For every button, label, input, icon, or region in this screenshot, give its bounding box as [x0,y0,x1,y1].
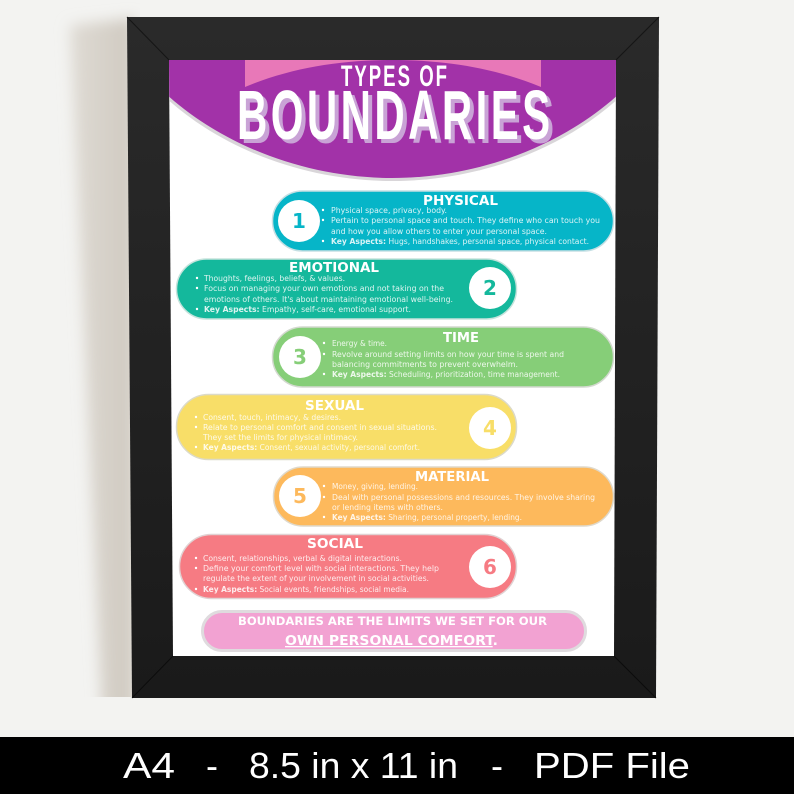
title line: types of: TYPES OF [341,60,447,93]
pink ribbon [245,60,541,87]
body text: Consent, relationships, verbal & digital interactions. [203,554,402,563]
number badge 5: 5 [293,484,307,508]
panel: social [180,534,516,598]
header banner [165,60,620,181]
heading: SOCIAL [307,536,363,552]
number badge 1: 1 [292,209,306,233]
body text: Revolve around setting limits on how your time is spent and [332,350,564,359]
body text: Physical space, privacy, body. [331,206,447,215]
title [237,60,554,159]
body text: Focus on managing your own emotions and not taking on the [204,284,444,293]
body text: Money, giving, lending. [332,482,418,491]
body text: or lending items with others. [332,503,443,512]
number badge 2 [469,267,511,309]
number badge 6: 6 [483,555,497,579]
dome shadow [169,86,616,181]
number badge 1 [278,200,320,242]
body text [195,554,439,594]
panel: sexual [176,394,516,460]
body text: regulate the extent of your involvement in social activities. [203,574,429,583]
number badge 5 [279,475,321,517]
panel: material [274,467,614,526]
body text: Consent, touch, intimacy, & desires. [203,413,341,422]
body text: Energy & time. [332,339,387,348]
number badge 2: 2 [483,276,497,300]
callout banner [202,612,586,650]
footer bar [0,737,794,794]
body text [322,206,600,246]
poster paper [169,60,616,656]
body text: Key Aspects: Empathy, self-care, emotional support. [204,305,411,314]
number badge 4 [469,407,511,449]
black picture frame [127,17,659,698]
body text: Deal with personal possessions and resources. They involve sharing [332,493,595,502]
heading: MATERIAL [415,469,489,485]
footer: dimensions: 8.5 in x 11 in [249,745,458,786]
heading: TIME [443,330,479,346]
title shadow: BOUNDARIES [241,81,554,159]
body text [195,413,437,452]
heading: SEXUAL [305,398,364,414]
body text [196,274,453,314]
body text: Key Aspects: Consent, sexual activity, personal comfort. [203,443,420,452]
body text [323,482,595,522]
footer: file type: PDF File [534,745,690,786]
body text: Key Aspects: Sharing, personal property, lending. [332,513,522,522]
panel: physical [272,191,614,251]
number badge 6 [469,546,511,588]
footer: dash: - [206,745,218,786]
body text: balancing commitments to prevent overwhelm. [332,360,518,369]
body text: They set the limits for physical intimacy. [202,433,358,442]
body text: Key Aspects: Scheduling, prioritization, time management. [332,370,560,379]
callout line 1: BOUNDARIES ARE THE LIMITS WE SET FOR OUR [238,614,547,628]
body text: Key Aspects: Social events, friendships, social media. [203,585,409,594]
heading: PHYSICAL [423,193,498,209]
wall shadow [70,18,135,720]
title line: boundaries: BOUNDARIES [237,77,550,155]
body text: emotions of others. It's about maintaining emotional well-being. [204,295,453,304]
number badge 4: 4 [483,416,497,440]
purple dome [165,60,620,178]
body text: Pertain to personal space and touch. They define who can touch you [331,216,600,225]
footer: size: A4 [123,745,175,786]
body text [323,339,564,379]
callout line 2: OWN PERSONAL COMFORT . [285,634,498,649]
body text: Key Aspects: Hugs, handshakes, personal space, physical contact. [331,237,589,246]
number badge 3: 3 [293,345,307,369]
body text: Relate to personal comfort and consent in sexual situations. [203,423,437,432]
body text: and how you allow others to enter your personal space. [331,227,547,236]
body text: Define your comfort level with social interactions. They help [203,564,439,573]
panel: time [272,327,614,387]
panel: emotional [176,259,516,319]
number badge 3 [279,336,321,378]
footer: dash: - [491,745,503,786]
body text: Thoughts, feelings, beliefs, & values. [203,274,345,283]
heading: EMOTIONAL [289,260,379,276]
